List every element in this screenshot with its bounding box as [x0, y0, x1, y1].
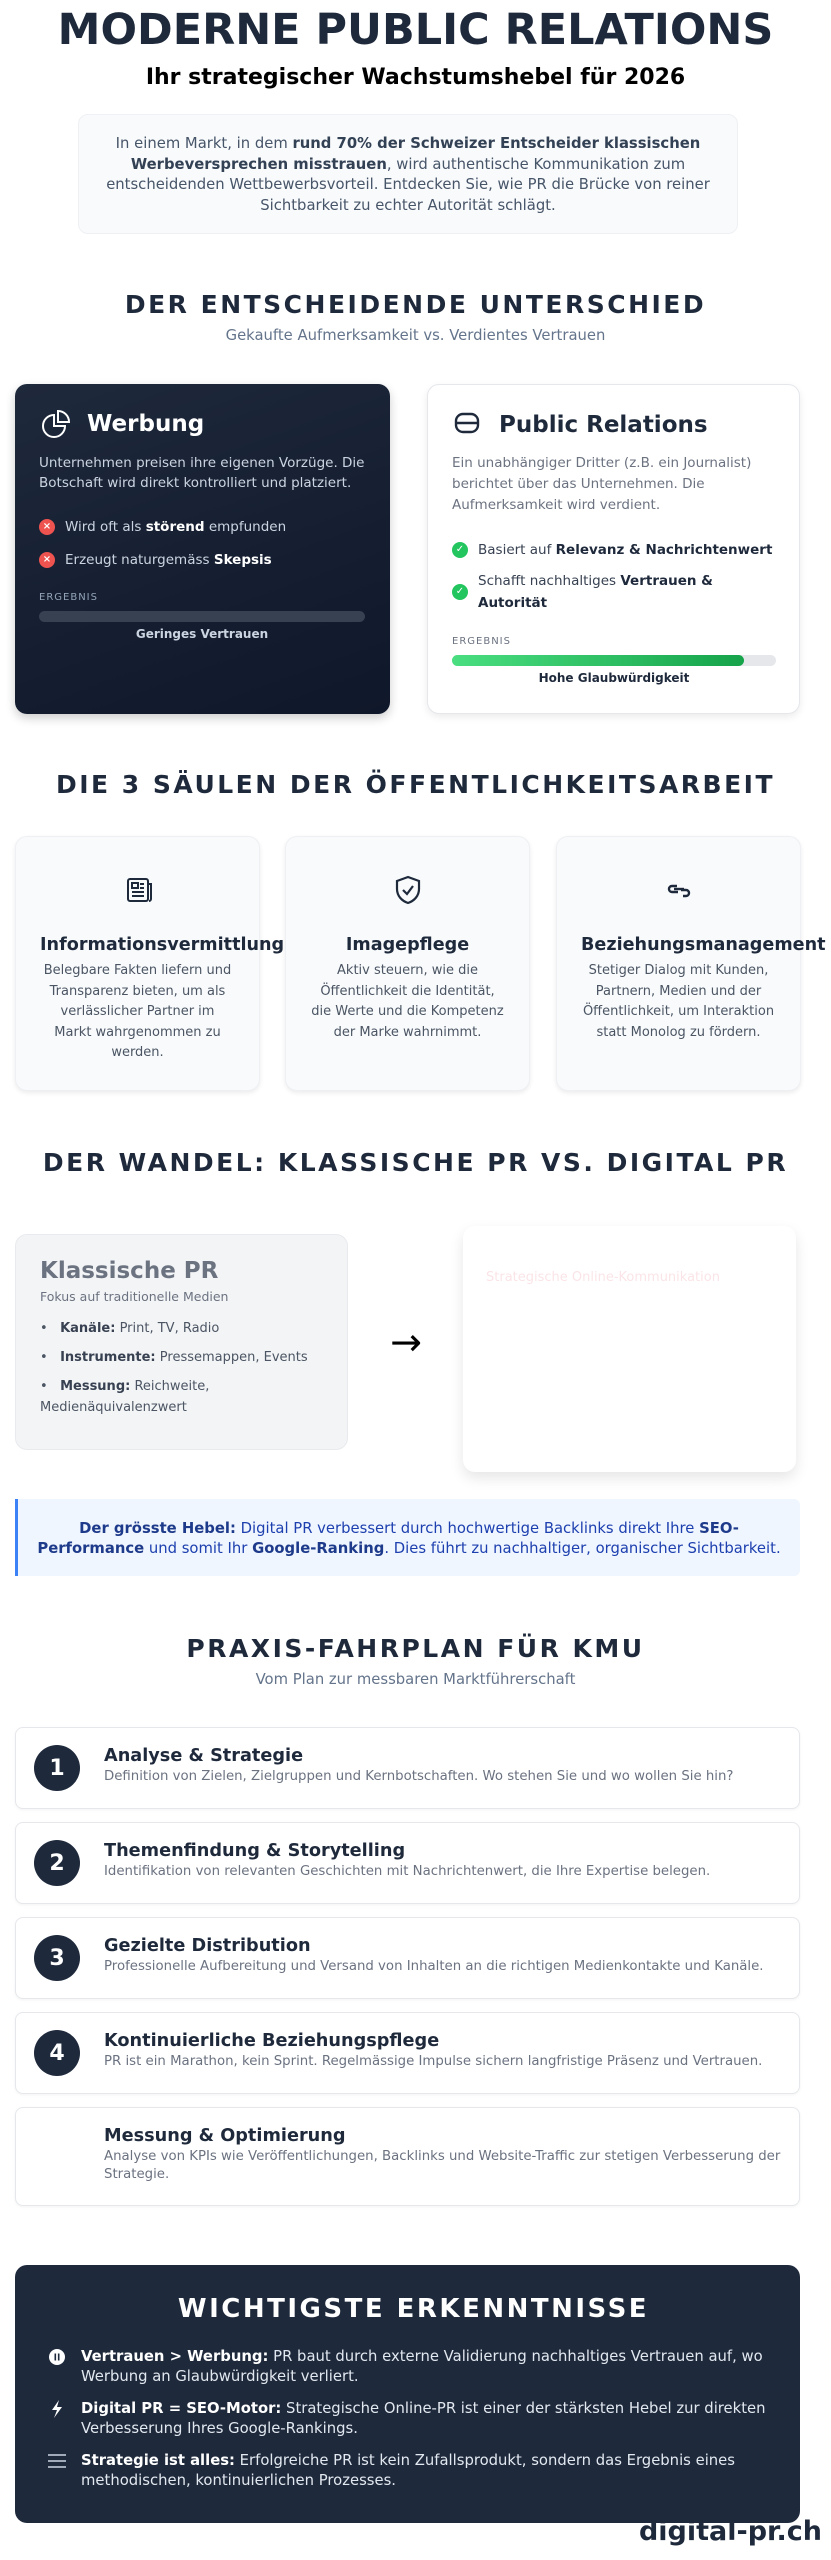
werbung result bar: Geringes Vertrauen — [136, 627, 268, 641]
klassische list: • Messung: Reichweite, Medienäquivalenzwert — [40, 1379, 209, 1415]
step 4 — [15, 2012, 800, 2094]
panel: informationsvermittlung — [15, 836, 260, 1091]
step 2: 2 — [49, 1850, 65, 1876]
panel: beziehungsmanagement — [556, 836, 801, 1091]
footer: brand: digital-pr.ch — [639, 2516, 822, 2547]
panel: imagepflege: Aktiv steuern, wie die Öffentlichkeit die Identität, die Werte und die Kompetenz der Marke wahrnimmt. — [311, 963, 504, 1040]
step 3: Gezielte Distribution — [104, 1936, 311, 1956]
step 4: 4 — [49, 2040, 65, 2066]
step 3: Professionelle Aufbereitung und Versand von Inhalten an die richtigen Medienkontakte und Kanäle. — [104, 1959, 764, 1974]
panel: beziehungsmanagement: Beziehungsmanagement — [581, 935, 826, 955]
step 4: Kontinuierliche Beziehungspflege — [104, 2031, 439, 2051]
klassische list: • Kanäle: Print, TV, Radio — [40, 1321, 219, 1336]
step 5: Analyse von KPIs wie Veröffentlichungen, Backlinks und Website-Traffic zur stetigen Verbesserung der Strategie. — [104, 2149, 780, 2182]
werbung bullets: Erzeugt naturgemäss Skepsis — [65, 552, 272, 568]
arrow: → — [390, 1320, 422, 1364]
pr result bar — [452, 636, 776, 685]
step 3 — [15, 1917, 800, 1999]
icon: shield — [396, 876, 420, 904]
pr heading: Public Relations — [499, 412, 708, 438]
step 1 — [15, 1727, 800, 1809]
subheading: gekaufte aufmerksamkeit: Gekaufte Aufmerksamkeit vs. Verdientes Vertrauen — [226, 327, 605, 344]
pr description: Ein unabhängiger Dritter (z.B. ein Journalist) berichtet über das Unternehmen. Die Aufmerksamkeit wird verdient. — [452, 455, 751, 513]
klassische list — [40, 1321, 308, 1415]
step 1: 1 — [49, 1756, 65, 1780]
panel: imagepflege — [285, 836, 530, 1091]
heading: der wandel: DER WANDEL: KLASSISCHE PR VS. DIGITAL PR — [43, 1148, 788, 1177]
pr bullets: ✓ — [456, 586, 464, 597]
step 3: 3 — [49, 1946, 65, 1970]
icon: newspaper — [127, 878, 152, 902]
step 5: Messung & Optimierung — [104, 2126, 346, 2146]
step 2: Themenfindung & Storytelling — [104, 1841, 405, 1861]
key list: Digital PR = SEO-Motor: Strategische Online-PR ist einer der stärksten Hebel zur direkten Verbesserung Ihres Google-Rankings. — [81, 2400, 766, 2437]
panel: werbung — [15, 384, 390, 714]
pr bullets — [452, 542, 772, 611]
heading: praxis-fahrplan: PRAXIS-FAHRPLAN FÜR KMU — [186, 1634, 645, 1663]
werbung bullets: × — [43, 554, 51, 565]
panel: klassische pr — [15, 1234, 348, 1450]
pr bullets: Schafft nachhaltiges Vertrauen & Autorität — [478, 573, 713, 611]
werbung bullets: × — [43, 521, 51, 532]
werbung result bar — [39, 592, 365, 641]
heading: 3 säulen: DIE 3 SÄULEN DER ÖFFENTLICHKEITSARBEIT — [56, 770, 775, 799]
klassische subtitle: Fokus auf traditionelle Medien — [40, 1289, 228, 1304]
panel: informationsvermittlung: Belegbare Fakten liefern und Transparenz bieten, um als verlässlicher Partner im Markt wahrgenommen zu werden. — [44, 963, 231, 1060]
panel: wichtigste erkenntnisse — [15, 2265, 800, 2523]
intro box — [78, 114, 738, 234]
title: MODERNE PUBLIC RELATIONS — [58, 5, 773, 55]
panel: informationsvermittlung: Informationsvermittlung — [40, 935, 284, 955]
icon: pie chart — [42, 410, 70, 438]
werbung description: Unternehmen preisen ihre eigenen Vorzüge. Die Botschaft wird direkt kontrolliert und platziert. — [39, 455, 364, 491]
klassische heading: Klassische PR — [40, 1258, 218, 1284]
step 2: Identifikation von relevanten Geschichten mit Nachrichtenwert, die Ihre Expertise belegen. — [104, 1864, 710, 1879]
intro box: In einem Markt, in dem rund 70% der Schweizer Entscheider klassischen Werbeversprechen misstrauen, wird authentische Kommunikation zum entscheidenden Wettbewerbsvorteil. Entdecken Sie, wie PR die Brücke von reiner Sichtbarkeit zu echter Autorität schlägt. — [106, 135, 710, 214]
pr bullets: ✓ — [456, 544, 464, 555]
subheading: vom plan: Vom Plan zur messbaren Marktführerschaft — [256, 1671, 575, 1688]
werbung bullets: Wird oft als störend empfunden — [65, 519, 286, 535]
step 1: Analyse & Strategie — [104, 1746, 303, 1766]
key list: Strategie ist alles: Erfolgreiche PR ist kein Zufallsprodukt, sondern das Ergebnis eines methodischen, kontinuierlichen Prozesses. — [81, 2452, 735, 2489]
panel: digital pr (faded) — [463, 1226, 796, 1472]
step 5 — [15, 2107, 800, 2206]
pr result bar: ERGEBNIS — [452, 636, 511, 647]
step 2 — [15, 1822, 800, 1904]
subtitle: Ihr strategischer Wachstumshebel für 2026 — [146, 65, 685, 90]
panel: public relations — [427, 384, 800, 714]
step 4: PR ist ein Marathon, kein Sprint. Regelmässige Impulse sichern langfristige Präsenz und Vertrauen. — [104, 2054, 762, 2069]
digital pr subtitle: Strategische Online-Kommunikation — [486, 1270, 720, 1285]
key list: Vertrauen > Werbung: PR baut durch externe Validierung nachhaltiges Vertrauen auf, wo Werbung an Glaubwürdigkeit verliert. — [81, 2348, 763, 2385]
heading: der entscheidende unterschied: DER ENTSCHEIDENDE UNTERSCHIED — [125, 290, 706, 319]
key heading: WICHTIGSTE ERKENNTNISSE — [178, 2294, 649, 2324]
pr bullets: Basiert auf Relevanz & Nachrichtenwert — [478, 542, 772, 558]
panel: imagepflege: Imagepflege — [346, 935, 469, 955]
werbung heading: Werbung — [87, 411, 204, 437]
key list — [48, 2348, 766, 2489]
step 1: Definition von Zielen, Zielgruppen und Kernbotschaften. Wo stehen Sie und wo wollen Sie hin? — [104, 1769, 734, 1784]
werbung result bar: ERGEBNIS — [39, 592, 98, 603]
werbung bullets — [39, 519, 286, 568]
callout: groesster hebel — [15, 1499, 800, 1576]
icon: link — [668, 884, 690, 898]
pr result bar: Hohe Glaubwürdigkeit — [539, 671, 689, 685]
panel: beziehungsmanagement: Stetiger Dialog mit Kunden, Partnern, Medien und der Öffentlichkeit, um Interaktion statt Monolog zu fördern. — [583, 963, 774, 1040]
klassische list: • Instrumente: Pressemappen, Events — [40, 1350, 308, 1365]
callout: groesster hebel: Der grösste Hebel: Digital PR verbessert durch hochwertige Backlinks direkt Ihre SEO-Performance und somit Ihr Google-Ranking. Dies führt zu nachhaltiger, organischer Sichtbarkeit. — [37, 1520, 781, 1557]
icon: pr — [454, 412, 480, 434]
